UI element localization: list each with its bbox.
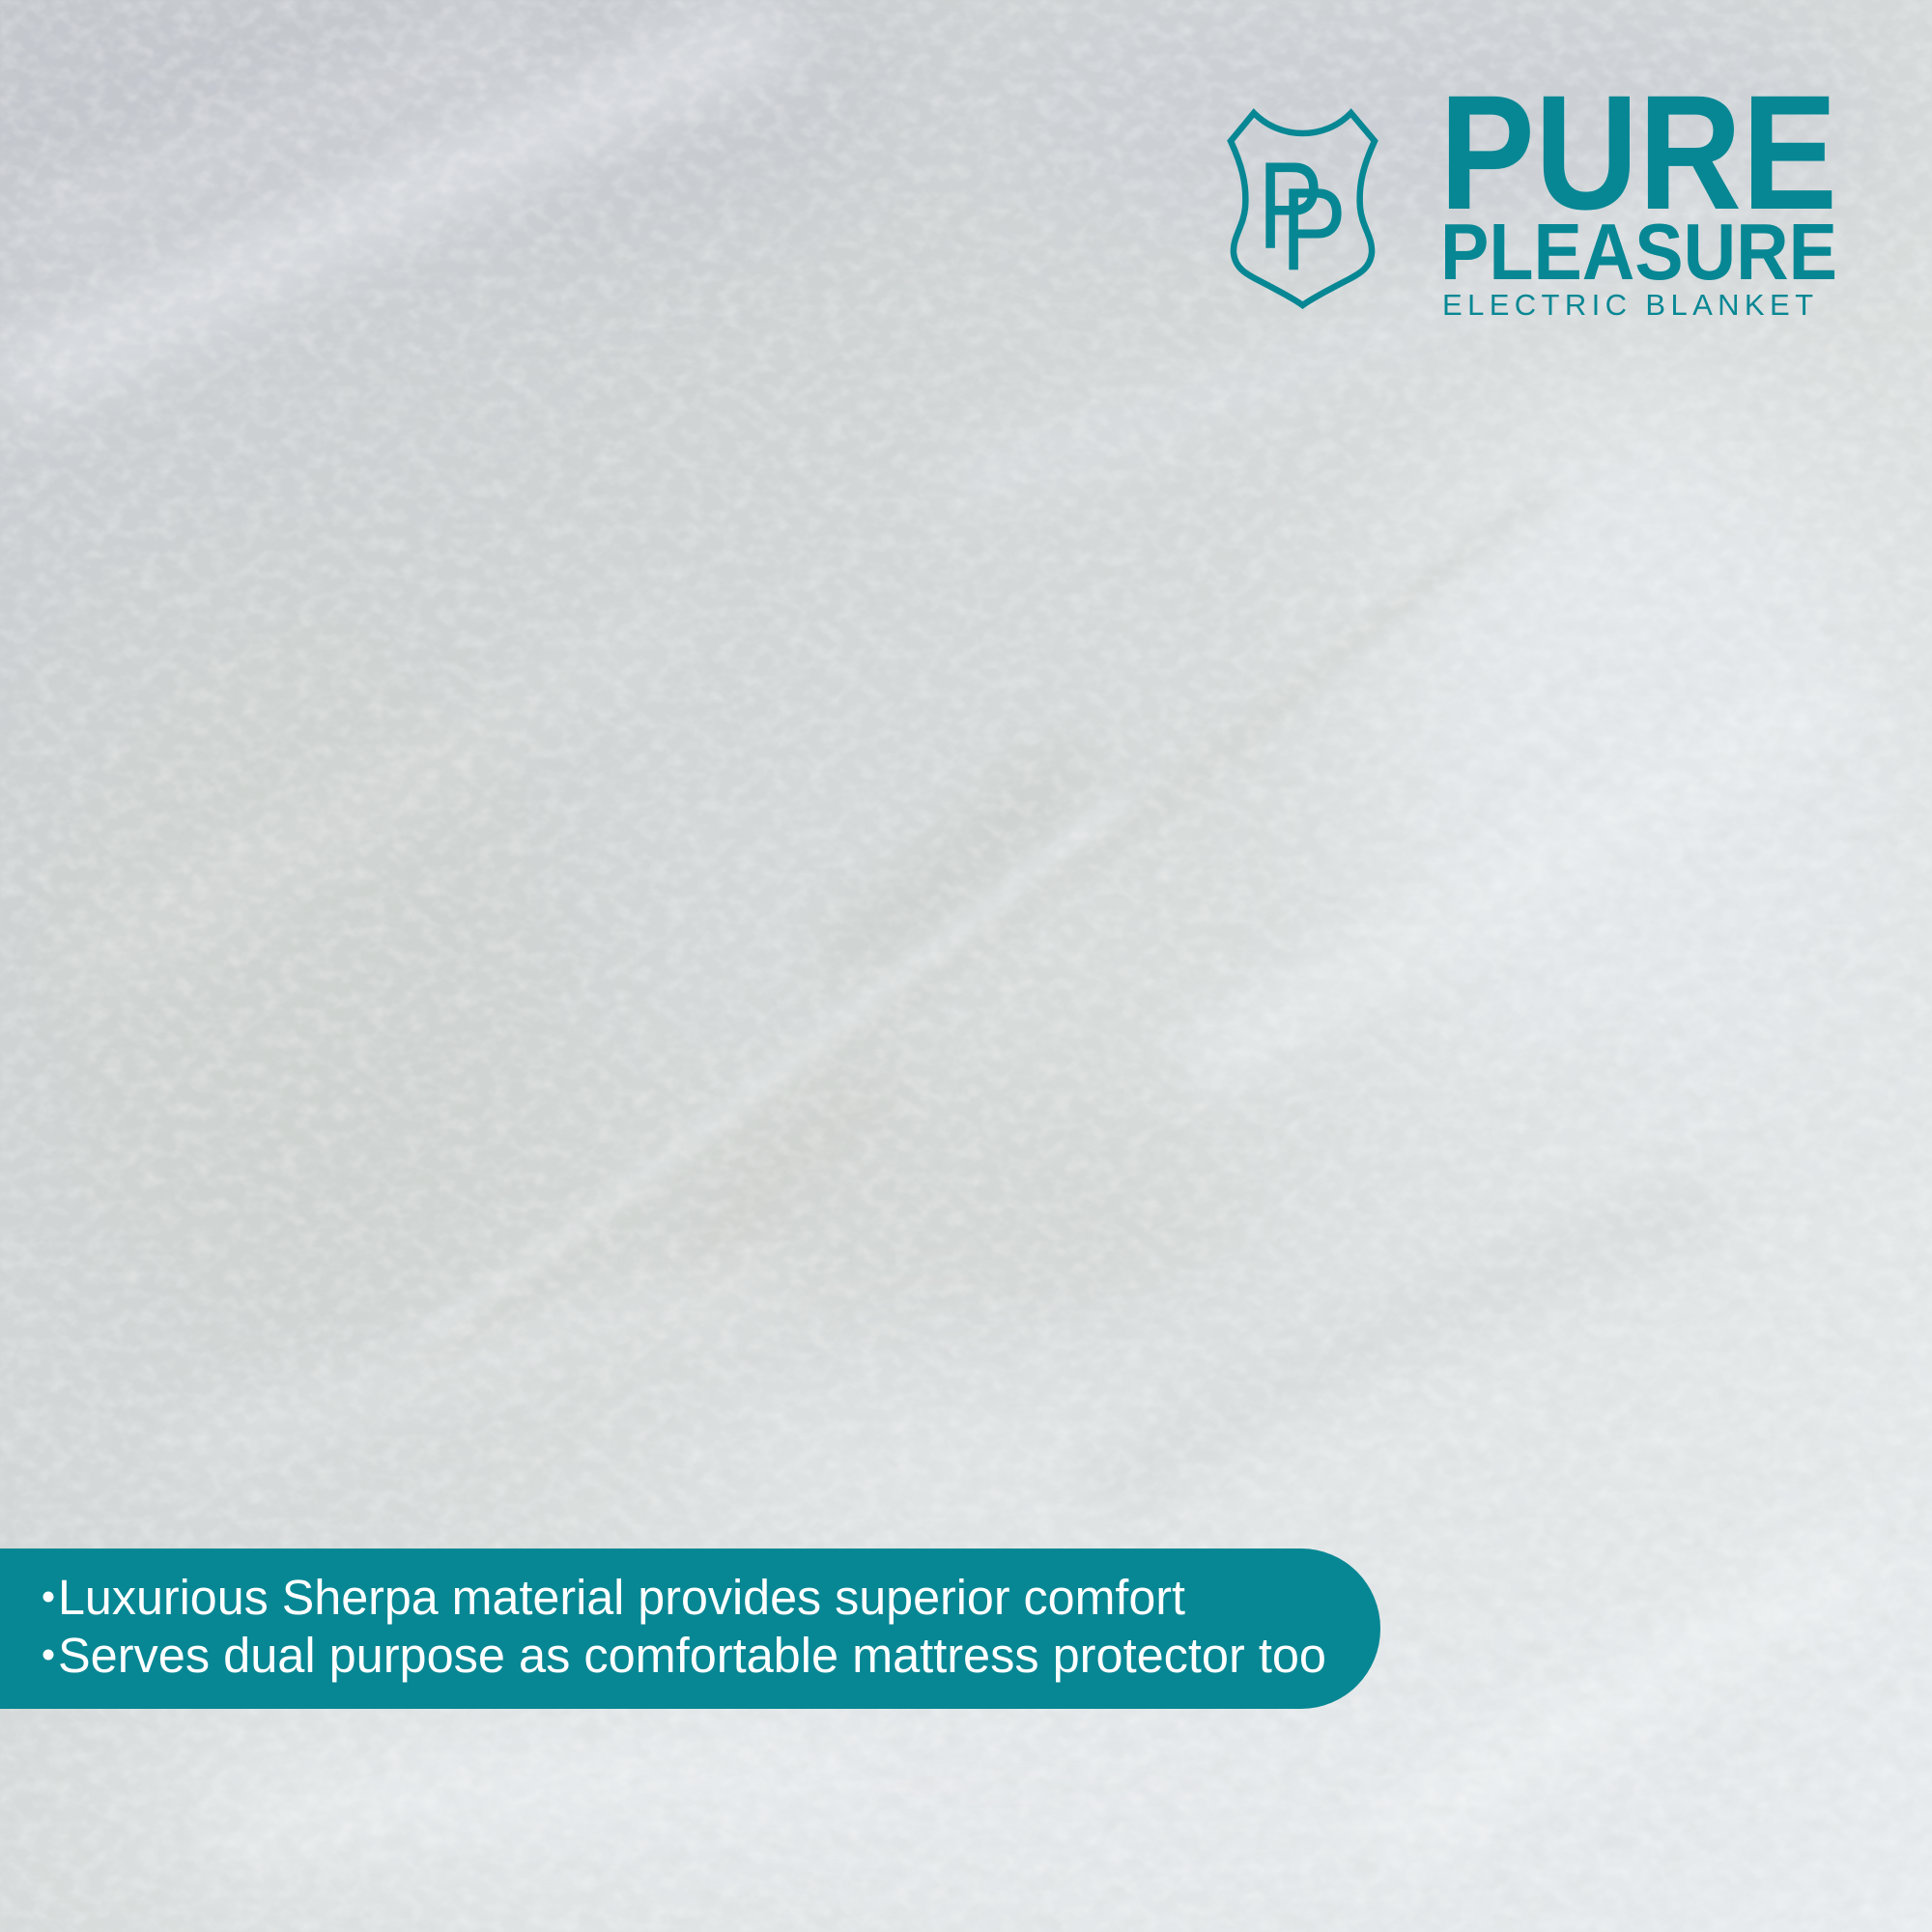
wordmark: PURE: PURE — [1439, 61, 1837, 243]
icon: shield with PP monogram — [1231, 113, 1375, 305]
wordmark: PLEASURE: PLEASURE — [1440, 207, 1837, 297]
callout band: product benefits — [0, 1548, 1380, 1709]
logo: Pure Pleasure Electric Blanket — [1231, 61, 1837, 322]
benefit line 2: Serves dual purpose as comfortable mattress protector too — [58, 1628, 1326, 1683]
icon: shield with PP monogram: P — [1281, 163, 1347, 295]
benefit line 1: Luxurious Sherpa material provides superior comfort — [58, 1570, 1185, 1625]
tagline: ELECTRIC BLANKET: ELECTRIC BLANKET — [1442, 288, 1813, 322]
icon: shield with PP monogram: P — [1258, 137, 1323, 275]
